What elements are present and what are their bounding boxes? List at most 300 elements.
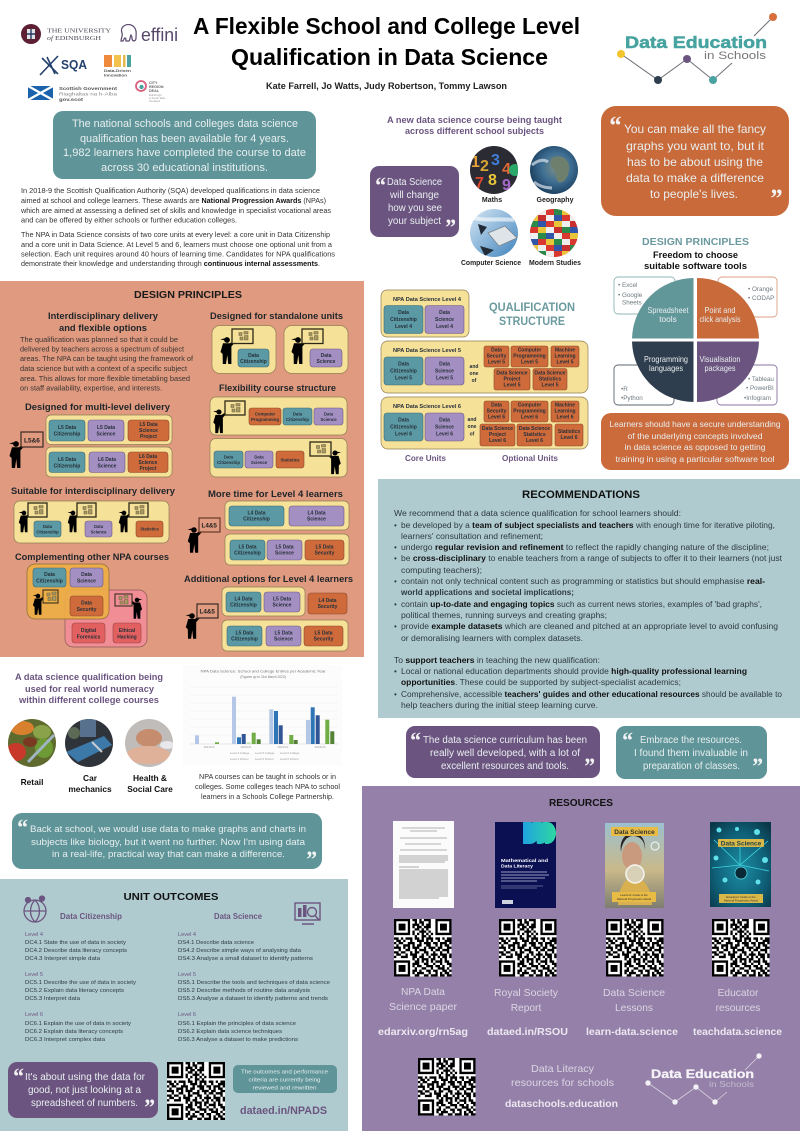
panel: level 5 structure: Level 5 <box>557 360 574 366</box>
sub-block: multi-level delivery: Science <box>97 432 116 438</box>
QR code: educator <box>712 919 770 976</box>
list: data science outcomes: DS4.2 Describe simple ways of analysing data <box>178 948 302 954</box>
box: spreadsheet tools list: • Excel <box>618 282 637 289</box>
sub-block: multi-level delivery: L5 Data <box>97 425 115 431</box>
panel: level 6 structure: Level 6 <box>436 432 453 438</box>
text block: introduction: which are aimed at assessing a defined set of skills and knowledge in specialist vocational areas <box>20 206 331 215</box>
sub-block: interdisciplinary delivery: and flexible options <box>59 323 147 333</box>
quote: well developed curriculum: ” <box>583 754 595 779</box>
course: health and social care <box>125 719 174 794</box>
panel: level 4 structure: Data <box>398 310 409 316</box>
list: data science outcomes: DS5.1 Describe the tools and techniques of data science <box>178 980 330 986</box>
sub-block: complementing other NPA courses: Digital <box>81 628 97 634</box>
sub-block: complementing other NPA courses: Complementing other NPA courses <box>15 552 169 562</box>
course: retail <box>6 719 56 787</box>
box: spreadsheet tools list: Sheets <box>622 300 642 306</box>
quadrant: programming languages <box>632 342 694 402</box>
callout: qualification stats: qualification has been available for 4 years. <box>80 133 289 145</box>
quote: embrace the resources: I found them invaluable in <box>634 748 748 759</box>
bar chart: entries per academic year <box>183 665 342 766</box>
logo: Data-Driven Innovation: Data-Driven <box>104 69 131 73</box>
quote: back at school <box>12 813 322 872</box>
subject: Maths: 1 <box>471 154 480 171</box>
panel: level 6 structure: one <box>468 424 477 430</box>
callout: qualification stats: across 30 educational institutions. <box>101 162 268 174</box>
logo: Scottish Government <box>28 86 118 102</box>
sub-block: standalone units <box>210 311 348 374</box>
heading: subjects <box>387 115 562 136</box>
panel: level 6 structure: Data <box>491 402 502 408</box>
logo: Data Education white: in Schools <box>709 1080 754 1089</box>
quote: embrace the resources <box>616 726 767 779</box>
panel: recommendations: be developed by a team of subject specialists and teachers with enough time for iterative piloting, <box>401 521 775 530</box>
sub-block: additional options for level 4: L4 Data <box>318 598 337 604</box>
sub-block: additional options for level 4: Citizenship <box>231 636 258 642</box>
sub-block: flexible course structure: Science <box>251 460 268 465</box>
bar chart: entries per academic year: Level 4 College <box>230 751 250 755</box>
label: dataschools: resources for schools <box>511 1078 614 1089</box>
quote: embrace the resources: “ <box>621 728 633 753</box>
text block: introduction: demonstrate their knowledge and understanding through continuous internal assessments. <box>21 259 320 268</box>
heading: qualification structure <box>489 302 575 328</box>
subject: Modern Studies: Modern Studies <box>529 260 581 267</box>
panel: recommendations: • <box>394 600 397 609</box>
label: paper: NPA Data <box>401 987 445 998</box>
caption: chart <box>195 772 340 801</box>
sub-block: additional options for level 4: L4 Data <box>234 596 253 602</box>
panel: level 4 structure: Citizenship <box>390 317 417 323</box>
panel: level 5 structure: Machine <box>555 348 575 354</box>
text block: introduction: and a core unit in Data Science. At Level 5 and 6, learners must choose one optional unit from a <box>21 240 332 249</box>
heading: qualification structure: STRUCTURE <box>499 316 565 328</box>
quote: fancy graphs: ” <box>769 184 782 213</box>
panel: resources: RESOURCES <box>549 798 613 809</box>
panel: recommendations: We recommend that a data science qualification for school learners should: <box>394 509 681 518</box>
panel: recommendations: Local or national education departments should provide high-quality professional learning <box>401 667 747 676</box>
callout: qualification stats: The national schools and colleges data science <box>72 118 298 130</box>
QR code: report <box>499 919 556 976</box>
sub-block: multi-level delivery: L5&6 <box>24 438 40 444</box>
list: data citizenship outcomes: DC4.1 State the use of data in society <box>25 940 126 946</box>
course: car mechanics: mechanics <box>68 784 112 794</box>
text block: introduction: selection. Each unit requires around 40 hours of learning time. Candidates for NPA qualifications <box>21 250 335 258</box>
panel: recommendations: or demoralising learners with complex datasets. <box>401 634 583 643</box>
sub-block: multi-level delivery: L6 Data <box>98 457 116 463</box>
list: data citizenship outcomes: DC4.3 Interpret simple data <box>25 956 101 962</box>
sub-block: more time for level 4: L4 Data <box>307 510 326 516</box>
box: visualisation list: • Tableau <box>748 376 774 383</box>
list: data citizenship outcomes: Level 6 <box>25 1012 43 1018</box>
label: data science: Data Science <box>214 912 263 921</box>
bar chart: entries per academic year: 2022/23 <box>315 745 326 749</box>
sub-block: additional options for level 4: L5 Data <box>273 596 291 602</box>
sub-block: standalone units: Designed for standalone units <box>210 311 343 321</box>
panel: level 4 structure: Data <box>439 310 450 316</box>
list: data science outcomes: DS5.2 Describe methods of routine data analysis <box>178 988 310 994</box>
logo: City Region Deal: CITY <box>149 81 158 85</box>
callout: secure understanding <box>601 413 789 470</box>
sub-block: multi-level delivery: Science <box>139 460 158 466</box>
callout: secure understanding: in data science as opposed to getting <box>624 442 766 452</box>
sub-block: complementing other NPA courses: Science <box>77 578 96 584</box>
logo: City Region Deal: & South East <box>149 96 166 100</box>
course: car mechanics <box>65 719 113 794</box>
bar chart: entries per academic year: NPA Data Science: School and College Entries per Academic Year <box>200 670 326 674</box>
sub-block: additional options for level 4: Citizenship <box>230 602 257 608</box>
list: data science outcomes: DS6.3 Analyse a dataset to make predictions <box>178 1037 298 1043</box>
logo: City Region Deal <box>136 81 166 103</box>
logo: Data Education in Schools <box>617 13 777 84</box>
panel: recommendations: • <box>394 622 397 631</box>
quote: well developed curriculum: excellent resources and tools. <box>441 761 569 772</box>
logo: Data Education white: Data Education <box>651 1067 754 1081</box>
sub-block: additional options for level 4: Science <box>274 636 293 642</box>
bar chart: entries per academic year: 2019/20 <box>204 745 215 749</box>
sub-block: flexible course structure: Programming <box>251 417 279 422</box>
quote: back at school: in a real-life, practical way that can make a difference. <box>52 848 285 859</box>
label: lessons: Data Science <box>603 988 665 999</box>
panel: recommendations: To support teachers in teaching the new qualification: <box>394 656 600 665</box>
list: data citizenship outcomes: DC6.1 Explain the use of data in society <box>25 1021 131 1027</box>
label: dataschools: Data Literacy <box>531 1064 595 1075</box>
icon: monitor with magnifier <box>295 903 320 924</box>
text block: introduction <box>20 186 335 268</box>
panel: level 6 structure: Project <box>489 432 506 438</box>
list: data science outcomes <box>178 932 330 1043</box>
panel: level 5 structure: Project <box>504 376 521 382</box>
sub-block: multi-level delivery: Citizenship <box>54 464 80 470</box>
panel: level 4 structure: Science <box>435 317 454 323</box>
label: lessons: Lessons <box>615 1003 653 1014</box>
sub-block: flexible course structure: Data <box>293 412 303 416</box>
sub-block: multi-level delivery: Project <box>140 434 157 440</box>
quote: data for good: It's about using the data for <box>25 1072 146 1083</box>
logo: University of Edinburgh: of EDINBURGH <box>47 35 102 42</box>
sub-block: complementing other NPA courses: Data <box>44 572 55 578</box>
panel: level 6 structure: Level 6 <box>526 438 543 444</box>
box: visualisation list <box>717 365 777 405</box>
panel: level 5 structure: Data <box>491 348 502 354</box>
quadrant: programming languages: Programming <box>644 354 688 364</box>
sub-block: suitable for interdisciplinary delivery: Science <box>91 530 107 534</box>
sub-block: multi-level delivery: Citizenship <box>54 432 80 438</box>
panel: recommendations: • <box>394 690 397 699</box>
list: data science outcomes: DS5.3 Analyse a dataset to identify patterns and trends <box>178 996 328 1002</box>
quote: data science will change: your subject <box>388 216 441 227</box>
heading: real world numeracy: used for real world numeracy <box>25 684 154 694</box>
subject: Maths: Maths <box>482 197 502 204</box>
quadrant: programming languages: languages <box>649 363 683 373</box>
subject: Maths <box>470 146 521 204</box>
heading: subjects: across different school subjects <box>405 126 544 136</box>
label: report: Royal Society <box>494 988 559 999</box>
logo: City Region Deal: Scotland <box>149 99 160 103</box>
panel: level 5 structure: of <box>472 378 477 384</box>
panel: level 5 structure: Statistics <box>539 376 561 382</box>
subject: Maths: 8 <box>488 172 497 189</box>
heading: real world numeracy <box>15 672 163 705</box>
sub-block: interdisciplinary delivery <box>20 311 193 392</box>
panel: recommendations: • <box>394 577 397 586</box>
panel: level 5 structure: Level 5 <box>436 376 453 382</box>
logo: Data-Driven Innovation: Innovation <box>104 74 127 78</box>
label: lessons: learn-data.science <box>586 1027 678 1038</box>
quote: data for good: ” <box>143 1095 155 1120</box>
panel: level 6 structure: Data Science <box>519 426 550 432</box>
callout: secure understanding: Learners should have a secure understanding <box>610 419 781 429</box>
sub-block: multi-level delivery: L6 Data <box>58 457 76 463</box>
logo: University of Edinburgh <box>21 24 112 44</box>
panel: level 6 structure: Machine <box>555 402 575 408</box>
panel: recommendations: world applications and societal implications; <box>400 588 574 597</box>
quote: back at school: ” <box>305 847 317 872</box>
sub-block: suitable for interdisciplinary delivery: Data <box>94 524 104 529</box>
panel: recommendations: computing teachers); <box>401 566 482 575</box>
panel: level 5 structure: one <box>470 371 479 377</box>
text block: introduction: The NPA in Data Science consists of two core units at every level: a core unit in Data Citizenship <box>21 230 330 239</box>
callout: qualification stats: 1,982 learners have completed the course to date <box>63 147 306 159</box>
quote: well developed curriculum: really well developed, with a lot of <box>430 748 580 759</box>
subject: Maths: 3 <box>491 152 500 169</box>
QR code: dataschools <box>418 1058 476 1116</box>
sub-block: more time for level 4 <box>188 489 349 565</box>
sub-block: multi-level delivery: Project <box>140 466 157 472</box>
callout: secure understanding: training in using a particular software tool <box>616 454 775 464</box>
sub-block: additional options for level 4: L5 Data <box>314 630 333 636</box>
sub-block: additional options for level 4: Security <box>318 604 338 610</box>
sub-block: more time for level 4: L5 Data <box>238 544 257 550</box>
panel: recommendations: • <box>394 543 397 552</box>
logo: Data Education white <box>645 1053 762 1105</box>
heading: design principles software tools: suitable software tools <box>644 261 747 271</box>
panel: recommendations: provide example datasets which are cleaned and pitched at an appropriate level to avoid confusing <box>401 622 778 631</box>
note: outcomes under review: reviewed and rewritten <box>252 1086 316 1092</box>
heading: real world numeracy: within different college courses <box>18 695 159 705</box>
sub-block: more time for level 4: Citizenship <box>243 516 270 522</box>
thumbnail: data science lessons: Learners' Guide to the <box>620 893 648 897</box>
thumbnail: data science lessons: National Progression Award <box>617 897 652 901</box>
sub-block: more time for level 4: L4 Data <box>247 510 266 516</box>
box: spreadsheet tools list: • Google <box>618 292 643 299</box>
chart: software tools quadrant diagram <box>614 277 777 405</box>
panel: recommendations: • <box>394 554 397 563</box>
sub-block: additional options for level 4: L4&5 <box>200 608 215 616</box>
label: educator: resources <box>716 1003 760 1014</box>
sub-block: multi-level delivery: Science <box>98 464 117 470</box>
sub-block: flexible course structure: Data <box>224 454 234 460</box>
callout: qualification stats <box>53 111 316 179</box>
sub-block: more time for level 4: L5 Data <box>315 544 334 550</box>
panel: recommendations: political themes, running surveys and creating graphs; <box>401 611 607 620</box>
sub-block: more time for level 4: More time for Level 4 learners <box>208 489 343 499</box>
quote: data for good: spreadsheet of numbers. <box>31 1098 138 1109</box>
sub-block: complementing other NPA courses <box>15 552 169 647</box>
quote: well developed curriculum <box>406 726 600 779</box>
panel: level 6 structure: Statistics <box>558 429 580 435</box>
panel: unit outcomes <box>0 879 348 1131</box>
bar chart: entries per academic year: Level 5 School <box>255 757 274 761</box>
sub-block: additional options for level 4: Additional options for Level 4 learners <box>184 574 353 584</box>
panel: level 6 structure: Level 6 <box>561 435 578 441</box>
bar chart: entries per academic year: (Figures up to 31st March 2023) <box>240 675 286 679</box>
panel: level 6 structure: NPA Data Science Level 6 <box>393 404 461 410</box>
panel: level 5 structure: Data Science <box>534 370 566 376</box>
panel: level 6 structure: Programming <box>513 408 546 414</box>
list: data science outcomes: Level 4 <box>178 932 196 938</box>
quadrant: spreadsheet tools: Spreadsheet <box>648 305 689 315</box>
sub-block: multi-level delivery <box>9 402 172 477</box>
sub-block: flexible course structure: Statistics <box>280 458 300 462</box>
panel: level 6 structure: Level 6 <box>395 432 412 438</box>
sub-block: complementing other NPA courses: Data <box>81 572 92 578</box>
panel: level 6 structure: Data <box>439 418 450 424</box>
logo: Data-Driven Innovation <box>104 55 131 78</box>
panel: level 5 structure: Level 5 <box>504 382 521 388</box>
sub-block: interdisciplinary delivery: The qualification was planned so that it could be <box>20 337 178 344</box>
logo: Data Education in Schools: in Schools <box>704 50 767 62</box>
panel: resources <box>362 786 800 1131</box>
title: Qualification in Data Science <box>231 44 548 70</box>
panel: level 5 structure: Computer <box>518 348 541 354</box>
sub-block: suitable for interdisciplinary delivery: Suitable for interdisciplinary delivery <box>11 486 175 496</box>
list: data citizenship outcomes: DC5.2 Explain data literacy concepts <box>25 988 124 994</box>
quote: data science will change: will change <box>389 190 440 201</box>
quadrant: visualisation packages <box>697 342 759 402</box>
panel: recommendations: RECOMMENDATIONS <box>522 489 640 501</box>
panel: recommendations: • <box>394 667 397 676</box>
label: core units: Core Units <box>405 454 446 463</box>
panel: level 5 structure: Security <box>487 354 507 360</box>
panel: level 6 structure: Level 6 <box>521 414 538 420</box>
list: data citizenship outcomes: Level 4 <box>25 932 43 938</box>
box: visualisation list: •Infogram <box>744 395 771 402</box>
panel: level 5 structure: Science <box>435 368 454 374</box>
quote: fancy graphs: has to be about using the <box>627 156 763 169</box>
sub-block: additional options for level 4: L5 Data <box>274 630 293 636</box>
sub-block: more time for level 4: L4&5 <box>202 522 217 530</box>
label: data citizenship: Data Citizenship <box>60 912 122 921</box>
logo: Scottish Government: Riaghaltas na h-Alba <box>59 92 118 96</box>
label: dataschools: dataschools.education <box>505 1099 618 1110</box>
sub-block: suitable for interdisciplinary delivery: Citizenship <box>36 530 59 534</box>
sub-block: complementing other NPA courses: Data <box>81 600 92 606</box>
quote: data science will change <box>370 166 459 240</box>
sub-block: additional options for level 4: Security <box>314 636 334 642</box>
sub-block: complementing other NPA courses: Forensics <box>77 634 101 640</box>
logo: City Region Deal: Edinburgh <box>149 93 162 97</box>
thumbnail: Royal Society report <box>495 822 556 908</box>
quote: fancy graphs: “ <box>608 111 621 140</box>
quote: embrace the resources: preparation of classes. <box>643 761 740 772</box>
bar chart: entries per academic year: 2021/22 <box>278 745 289 749</box>
authors: Kate Farrell, Jo Watts, Judy Robertson, Tommy Lawson <box>266 81 507 91</box>
list: data science outcomes: DS6.1 Explain the principles of data science <box>178 1021 296 1027</box>
logo: SQA: SQA <box>61 58 87 72</box>
box: point and click list: • Orange <box>748 286 773 293</box>
sub-block: more time for level 4: Security <box>315 550 335 556</box>
label: educator: Educator <box>718 988 759 999</box>
note: outcomes under review: criteria are currently being <box>248 1078 320 1084</box>
QR code: paper <box>394 919 452 976</box>
quote: fancy graphs: data to make a difference <box>626 172 764 185</box>
sub-block: flexible course structure: Flexibility course structure <box>219 383 336 393</box>
panel: design principles <box>0 281 364 657</box>
panel: level 6 structure: Level 6 <box>489 438 506 444</box>
course: health and social care: Social Care <box>127 784 173 794</box>
sub-block: multi-level delivery: Designed for multi-level delivery <box>25 402 170 412</box>
logo: Scottish Government: Scottish Government <box>59 86 118 91</box>
panel: level 4 structure: NPA Data Science Level 4 <box>393 297 462 303</box>
quote: embrace the resources: Embrace the resources. <box>640 735 742 746</box>
heading: DESIGN PRINCIPLES <box>134 289 242 301</box>
panel: level 5 structure: Programming <box>513 354 546 360</box>
course: car mechanics: Car <box>83 773 98 783</box>
thumbnail: data science lessons: Data Science <box>614 829 655 836</box>
bar chart: entries per academic year: Level 5 College <box>255 751 275 755</box>
sub-block: additional options for level 4: Science <box>273 602 292 608</box>
callout: secure understanding: of the underlying concepts involved <box>628 431 763 441</box>
sub-block: standalone units: Science <box>317 359 336 365</box>
panel: recommendations: opportunities . These could be supported by subject-specialist academics; <box>401 678 681 687</box>
title <box>193 13 580 70</box>
panel: level 4 structure <box>381 290 469 337</box>
panel: level 6 structure: and <box>468 417 476 423</box>
box: visualisation list: • PowerBI <box>746 385 774 392</box>
caption: chart: learners in a Schools College Partnership. <box>201 792 334 801</box>
box: programming list: •Python <box>621 395 643 402</box>
sub-block: additional options for level 4: L5 Data <box>235 630 254 636</box>
panel: recommendations: help teachers during the initial steep learning curve. <box>401 701 598 710</box>
note: outcomes under review <box>233 1065 337 1093</box>
label: paper: Science paper <box>389 1002 458 1013</box>
list: data science outcomes: DS4.3 Analyse a small dataset to identify patterns <box>178 956 313 962</box>
panel: recommendations <box>378 479 800 718</box>
thumbnail: NPA paper <box>393 821 454 908</box>
logo: effini: effini <box>141 25 178 45</box>
sub-block: interdisciplinary delivery: data science but with a context of a specific subject <box>20 366 187 373</box>
sub-block: suitable for interdisciplinary delivery: Data <box>43 524 53 529</box>
label: optional units: Optional Units <box>502 454 558 463</box>
panel: recommendations: be cross-disciplinary to enable teachers from a range of subjects to offer it to their learners (not just <box>401 554 783 563</box>
panel: level 5 structure: Data <box>439 362 450 368</box>
heading: qualification structure: QUALIFICATION <box>489 302 575 314</box>
logo: City Region Deal: DEAL <box>149 89 160 93</box>
logo: effini <box>121 25 178 45</box>
sub-block: multi-level delivery: L5 Data <box>139 422 158 428</box>
quote: fancy graphs <box>601 106 789 216</box>
panel: level 4 structure: Level 4 <box>395 324 412 330</box>
subject: Modern Studies <box>529 209 581 267</box>
text block: introduction: In 2018-9 the Scottish Qualification Authority (SQA) developed qualifications in data science <box>21 186 320 195</box>
text block: introduction: and can be offered by either schools or further education colleges. <box>21 216 237 224</box>
quote: data science will change: how you see <box>388 203 443 214</box>
logo: Scottish Government: gov.scot <box>59 97 84 102</box>
bar chart: entries per academic year: Level 4 School <box>230 757 249 761</box>
panel: level 5 structure: Citizenship <box>390 368 417 374</box>
sub-block: flexible course structure: Citizenship <box>286 417 309 422</box>
sub-block: standalone units: Data <box>248 353 259 359</box>
label: report: Report <box>511 1003 541 1014</box>
sub-block: complementing other NPA courses: Citizenship <box>36 578 63 584</box>
heading: design principles software tools: DESIGN PRINCIPLES <box>642 236 749 248</box>
heading: subjects: A new data science course being taught <box>387 115 562 125</box>
box: programming list <box>614 365 674 405</box>
quote: embrace the resources: ” <box>751 754 763 779</box>
list: data citizenship outcomes: DC5.1 Describe the use of data in society <box>25 980 136 986</box>
heading: design principles software tools: Freedom to choose <box>653 250 738 260</box>
subject: Geography <box>530 146 578 204</box>
panel: level 5 structure: Data <box>398 362 409 368</box>
